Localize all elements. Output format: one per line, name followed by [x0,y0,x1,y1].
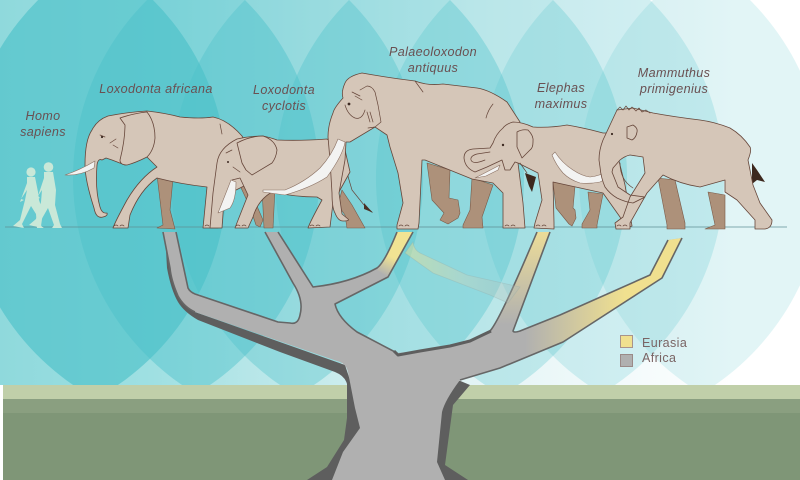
label: Loxodonta cyclotis: Loxodonta [253,83,315,97]
label: Palaeoloxodon antiquus: Palaeoloxodon [389,45,477,59]
label: Palaeoloxodon antiquus: antiquus [408,61,459,75]
tree outline [163,232,682,380]
species: Palaeoloxodon antiquus [263,73,525,229]
label: Elephas maximus: maximus [535,97,588,111]
crotch shadow [394,331,491,355]
label: Homo sapiens: sapiens [20,125,66,139]
trunk curl inner [471,152,490,162]
tail tuft [752,163,765,184]
tusk [65,161,95,175]
label: Mammuthus primigenius: primigenius [639,82,708,96]
face detail [100,124,222,226]
far legs [658,178,685,229]
ear [517,130,533,158]
forehead and back lines [352,81,515,226]
tree body [163,232,682,480]
tusk long [552,152,610,183]
tail of Palaeoloxodon [520,163,527,173]
tree shadow [166,250,470,480]
label: Elephas maximus: Elephas [537,81,585,95]
far legs [427,163,460,224]
ear [627,125,637,140]
label: Loxodonta africana: Loxodonta africana [99,82,213,96]
fur crest [617,106,650,226]
body [85,111,252,228]
ear [237,136,277,175]
far legs [157,175,175,229]
branch: Mammuthus Eurasian tip [505,238,682,364]
tail [347,173,372,212]
far legs [262,188,275,228]
body [210,136,350,228]
species: Loxodonta africana [65,111,263,229]
legend: Africa: Africa [642,351,676,365]
ear [120,112,155,165]
ear [345,86,381,128]
tail tuft [525,173,536,192]
tusk [475,165,500,178]
tusk [263,139,345,195]
label: Loxodonta cyclotis: cyclotis [262,99,306,113]
species: Loxodonta cyclotis [210,136,373,228]
branch: Elephas Eurasian tip [491,232,550,331]
label: Mammuthus primigenius: Mammuthus [638,66,711,80]
ground bands [3,385,800,480]
body [464,122,632,229]
tusks [218,180,236,213]
phylogenetic tree [163,232,682,480]
hybrid gene-flow band [405,242,520,303]
label: Homo sapiens: Homo [26,109,60,123]
far legs [553,182,576,226]
icon: two walking humans [13,162,62,228]
body [328,73,525,229]
branch: Palaeoloxodon Eurasian tip [377,232,413,277]
legend [620,336,687,366]
legend: Eurasia: Eurasia [642,336,687,350]
body [599,108,772,229]
species: Mammuthus primigenius [552,106,772,229]
thin tusk [620,163,633,188]
species: Elephas maximus [464,122,632,229]
ground line [5,226,787,228]
